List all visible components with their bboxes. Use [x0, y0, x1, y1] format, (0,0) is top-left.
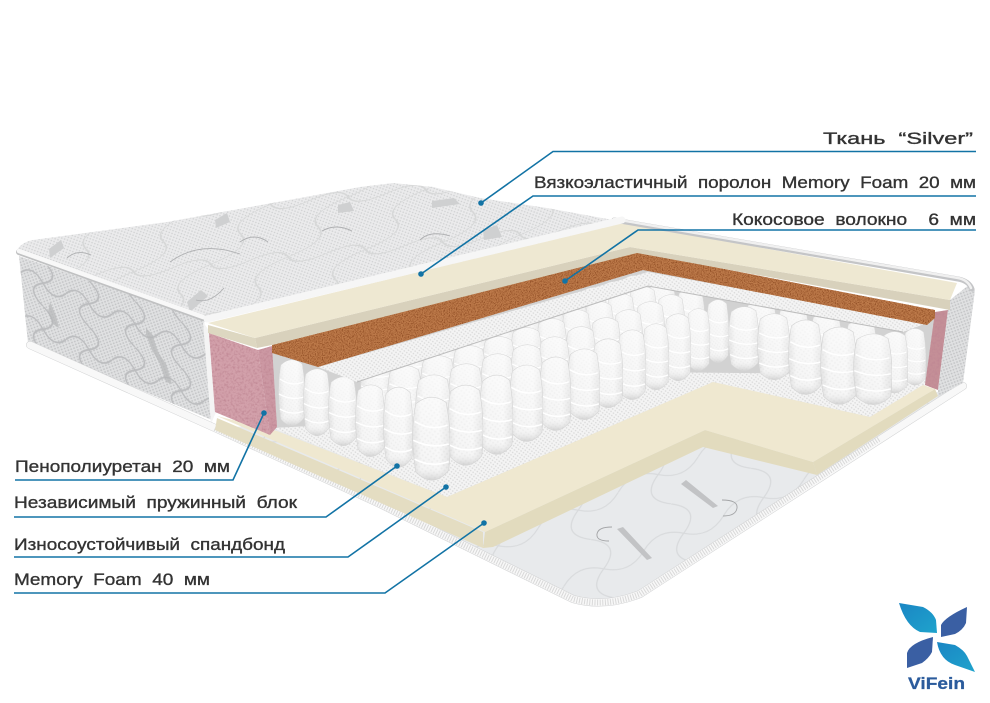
logo wordmark: ViFein: [908, 674, 965, 693]
upper memory foam layer: [208, 222, 957, 348]
label: memory foam 20 mm: [418, 173, 976, 277]
label: pocket spring block: [14, 463, 400, 517]
lower memory foam layer: [215, 382, 938, 548]
bottom panel with quilting: [215, 385, 963, 604]
label: coconut fibre: [562, 210, 976, 284]
pocket spring block: [278, 275, 926, 480]
label: spunbond: [14, 484, 449, 557]
label: spunbond: Износоустойчивый спандбонд: [14, 535, 285, 554]
right side panel: [938, 284, 975, 397]
mattress top quilted surface: [17, 183, 640, 322]
label: polyurethane foam: [15, 410, 267, 480]
spacer fabric sheet: [318, 272, 927, 382]
mattress side quilted panel: [19, 256, 216, 424]
label: memory foam 40 mm: [14, 520, 487, 593]
piping along the bottom edges: [30, 345, 963, 603]
coconut fibre layer: [272, 252, 935, 367]
label: memory foam 20 mm: Вязкоэластичный поролон Memory Foam 20 мм: [534, 173, 976, 192]
inner cavity backdrop: [272, 262, 935, 497]
label: pocket spring block: Независимый пружинный блок: [14, 493, 298, 512]
icon: four petals: [899, 603, 975, 672]
label: fabric Silver: Ткань “Silver”: [823, 129, 973, 148]
spunbond layer: [272, 372, 925, 497]
right polyurethane foam wall: [925, 310, 948, 390]
left polyurethane foam wall: [209, 333, 277, 435]
logo: ViFein: [899, 603, 975, 693]
label: memory foam 40 mm: Memory Foam 40 мм: [14, 570, 210, 589]
piping and lumpy edge of the top panel: [19, 219, 972, 319]
mattress illustration: [17, 183, 975, 604]
label: coconut fibre: Кокосовое волокно 6 мм: [732, 210, 976, 229]
label: polyurethane foam: Пенополиуретан 20 мм: [15, 457, 230, 476]
label: fabric Silver: [478, 129, 976, 206]
